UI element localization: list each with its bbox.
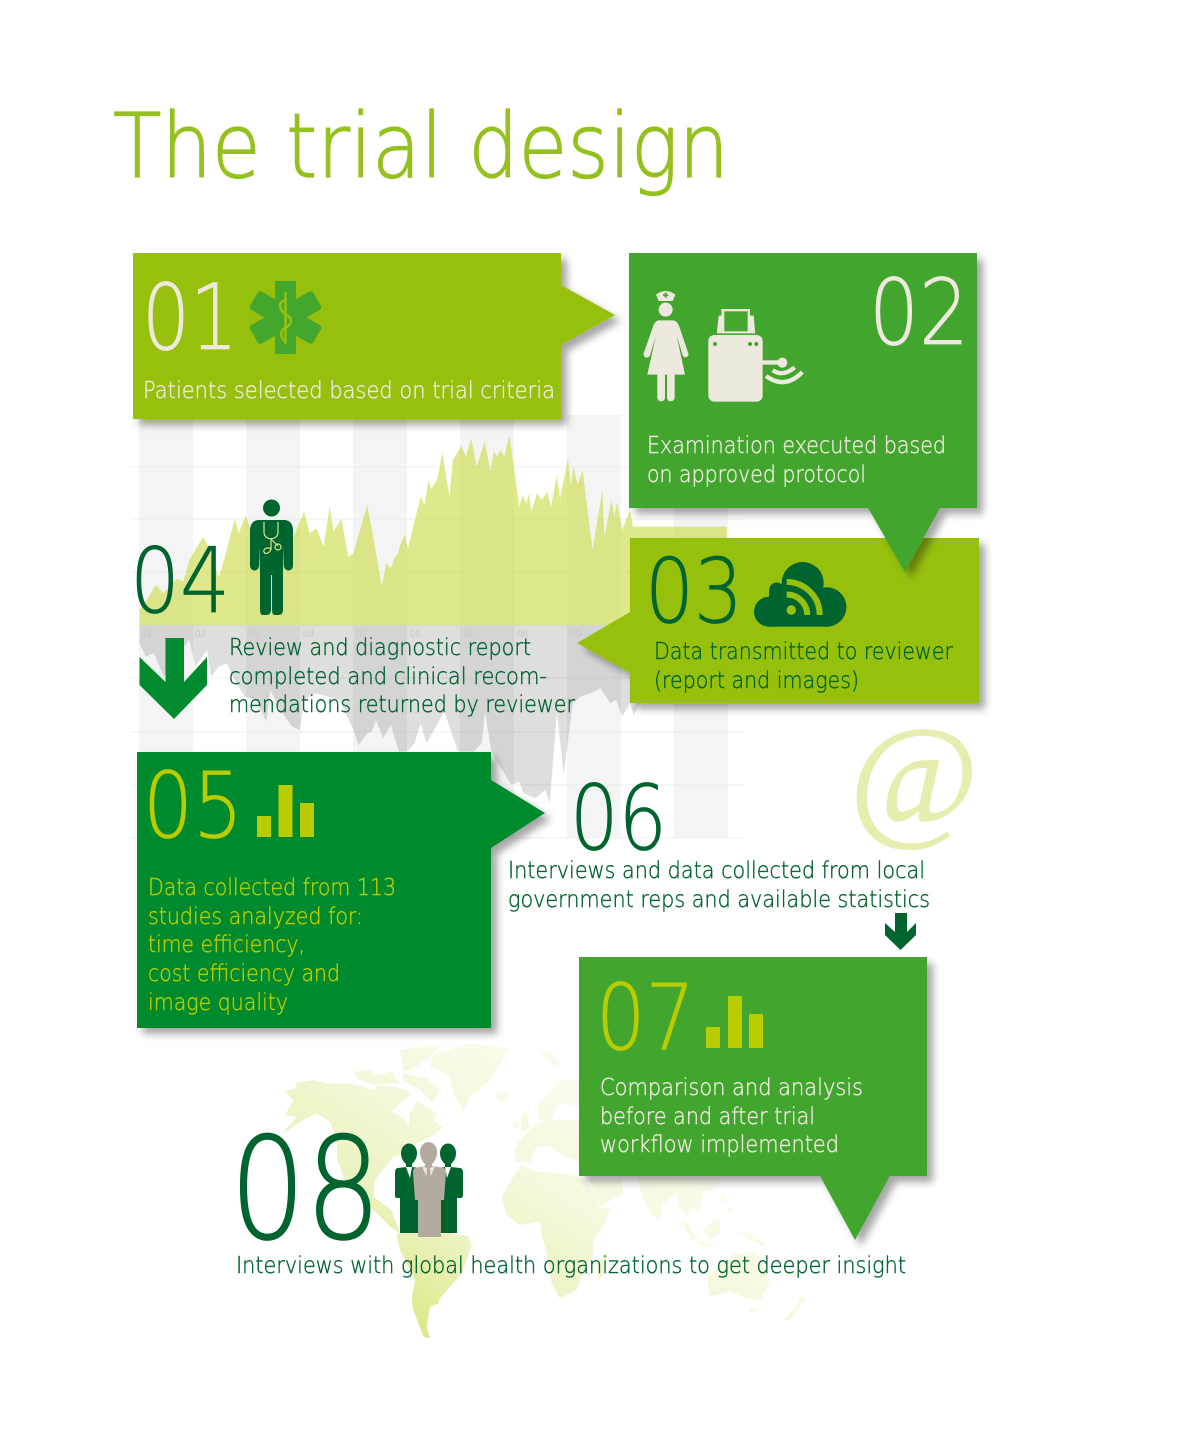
icon: doctor (250, 500, 293, 615)
icon: bar chart (257, 785, 314, 837)
panel: step 05 (137, 752, 545, 1028)
text 02: on approved protocol (647, 462, 866, 488)
text 01: Patients selected based on trial criteria (143, 378, 555, 404)
text 05: studies analyzed for: (148, 904, 363, 930)
number 05: 05 (143, 754, 243, 859)
text 08: Interviews with global health organizations to get deeper insight (236, 1253, 906, 1279)
chart: background area chart: 05 (356, 629, 368, 640)
chart: background area chart: 07 (463, 629, 475, 640)
icon: bar chart (706, 996, 763, 1048)
text 03 (654, 639, 953, 694)
icon: three business people (395, 1142, 463, 1237)
text 04: Review and diagnostic report (229, 635, 531, 661)
panel 01 arrow box (133, 253, 615, 419)
chart: background area chart: 08 (517, 629, 529, 640)
number 03: 03 (645, 539, 743, 643)
number 07: 07 (596, 966, 695, 1071)
number 08: 08 (230, 1108, 381, 1272)
number 01: 01 (142, 266, 238, 371)
panel 07 callout box (579, 957, 927, 1240)
chart: background area chart: 01 (141, 629, 153, 640)
text 05: time efficiency, (148, 932, 305, 958)
chart: background area chart: 06 (410, 629, 422, 640)
text 06: Interviews and data collected from local (508, 858, 925, 884)
title: The trial design (113, 94, 729, 198)
panel: step 02 (629, 253, 977, 572)
text 05 (148, 875, 396, 1016)
text 07: before and after trial (600, 1104, 815, 1130)
text 03: Data transmitted to reviewer (654, 639, 953, 665)
text 05: cost efficiency and (148, 961, 340, 987)
arrow: down to step 05 (140, 638, 207, 719)
text 04: completed and clinical recom- (229, 664, 547, 690)
panel: step 06 (508, 699, 978, 950)
text 04 (229, 635, 575, 718)
icon: cloud with signal (754, 562, 846, 627)
text 02: Examination executed based (647, 433, 946, 459)
chart: background area chart: 04 (303, 629, 315, 640)
text 07: workflow implemented (600, 1132, 839, 1158)
arrow: down to step 07 (885, 913, 916, 950)
chart: background area chart: 09 (570, 629, 582, 640)
panel: step 04 (130, 500, 575, 719)
icon: star of life (249, 281, 322, 354)
panel: step 08 (230, 1108, 906, 1279)
panel: step 07 (579, 957, 927, 1240)
chart: background area chart (130, 415, 745, 838)
text 04: mendations returned by reviewer (229, 692, 575, 718)
text 02 (647, 433, 946, 488)
text 07 (600, 1075, 863, 1158)
icon: at sign: @ (849, 699, 978, 854)
icon: nurse and scanner (644, 291, 802, 402)
text 06: government reps and available statistics (508, 887, 930, 913)
panel: step 01 (133, 253, 615, 419)
panel 02 callout box (629, 253, 977, 572)
number 06: 06 (570, 766, 667, 871)
chart: background area chart: 03 (249, 629, 261, 640)
text 06 (508, 858, 930, 913)
text 03: (report and images) (654, 668, 859, 694)
number 02: 02 (869, 261, 969, 366)
world map (282, 1043, 807, 1338)
text 05: image quality (148, 990, 288, 1016)
chart: background area chart: 02 (195, 629, 207, 640)
text 05: Data collected from 113 (148, 875, 396, 901)
panel: step 03 (577, 538, 979, 703)
panel 03 arrow box (577, 538, 979, 703)
text 07: Comparison and analysis (600, 1075, 863, 1101)
panel 05 arrow box (137, 752, 545, 1028)
number 04: 04 (130, 529, 230, 634)
